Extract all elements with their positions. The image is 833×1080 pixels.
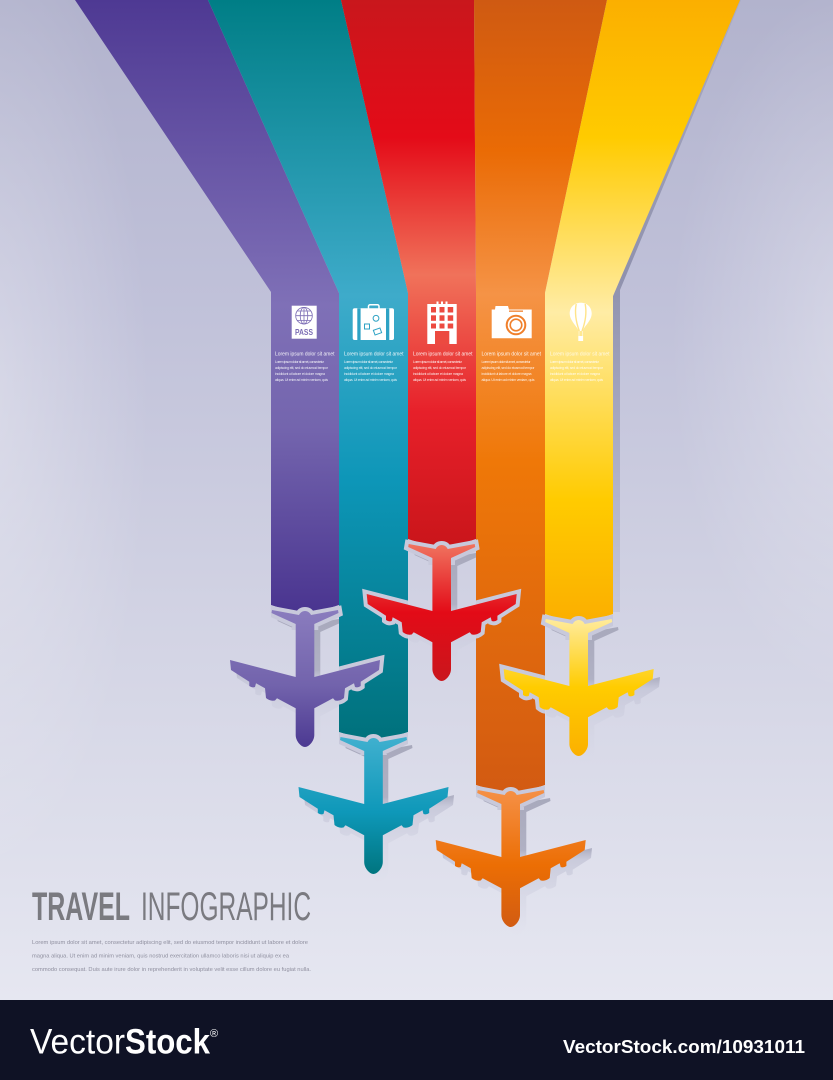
text block: teal column: Lorem ipsum dolor sit amet, consectetur [344, 360, 394, 364]
text block: red column: aliqua. Ut enim ad minim veniam, quis [413, 378, 466, 382]
ribbon: teal [208, 0, 408, 740]
text block: purple column: Lorem ipsum dolor sit amet [275, 352, 335, 358]
text block: red column: incididunt ut labore et dolore magna [413, 372, 463, 376]
text block: yellow column [550, 352, 610, 382]
text block: red column: adipiscing elit, sed do eiusmod tempor [413, 366, 467, 370]
plane shadows [236, 552, 660, 935]
icon: passport [292, 306, 317, 339]
text block: teal column: adipiscing elit, sed do eiusmod tempor [344, 366, 398, 370]
ribbon: purple [75, 0, 339, 613]
text block: teal column: aliqua. Ut enim ad minim veniam, quis [344, 378, 397, 382]
text block: red column [413, 352, 473, 382]
text block: yellow column: adipiscing elit, sed do eiusmod tempor [550, 366, 604, 370]
text block: orange column: Lorem ipsum dolor sit amet [482, 352, 541, 358]
text block: orange column: incididunt ut labore et dolore magna [482, 372, 532, 376]
footer image id: VectorStock.com/10931011 [563, 1036, 805, 1057]
text block: yellow column: Lorem ipsum dolor sit amet [550, 352, 610, 358]
ribbon: yellow [545, 0, 740, 622]
text block: purple column: adipiscing elit, sed do eiusmod tempor [275, 366, 329, 370]
text block: teal column: incididunt ut labore et dolore magna [344, 372, 394, 376]
title [32, 885, 311, 929]
text block: purple column: aliqua. Ut enim ad minim veniam, quis [275, 378, 328, 382]
description text [32, 940, 311, 973]
text block: yellow column: aliqua. Ut enim ad minim veniam, quis [550, 378, 603, 382]
text block: teal column: Lorem ipsum dolor sit amet [344, 352, 404, 358]
text block: orange column [482, 352, 541, 382]
plane: orange [436, 790, 586, 927]
icon: passport: PASS [295, 327, 313, 337]
plane: yellow [504, 619, 654, 756]
ribbon: orange [474, 0, 607, 793]
icon: suitcase [353, 305, 394, 340]
text block: orange column: adipiscing elit, sed do eiusmod tempor [482, 366, 535, 370]
footer logo: Vector [30, 1022, 125, 1062]
text block: purple column: Lorem ipsum dolor sit amet, consectetur [275, 360, 325, 364]
text block: orange column: aliqua. Ut enim ad minim veniam, quis [482, 378, 535, 382]
footer logo: ® [210, 1028, 218, 1040]
icon: hot air balloon [570, 303, 592, 341]
footer logo: Stock [125, 1022, 210, 1062]
text block: yellow column: Lorem ipsum dolor sit amet, consectetur [550, 360, 600, 364]
plane: teal [298, 737, 448, 874]
icon: camera [492, 306, 532, 338]
text block: orange column: Lorem ipsum dolor sit amet, consectetur [482, 360, 531, 364]
text block: purple column: incididunt ut labore et dolore magna [275, 372, 325, 376]
footer logo [30, 1022, 218, 1062]
text block: red column: Lorem ipsum dolor sit amet [413, 352, 473, 358]
title: TRAVEL [32, 885, 130, 929]
text block: purple column [275, 352, 335, 382]
ribbon: red [341, 0, 476, 547]
plane: red [367, 544, 517, 681]
icon: hotel [427, 302, 457, 344]
plane cutout outlines [271, 539, 613, 810]
yellow ribbon drop shadow [613, 0, 741, 612]
plane: purple [230, 610, 380, 747]
title: INFOGRAPHIC [141, 885, 311, 929]
text block: yellow column: incididunt ut labore et dolore magna [550, 372, 600, 376]
description text: commodo consequat. Duis aute irure dolor in reprehenderit in voluptate velit esse cillum dolore eu fugiat nulla. [32, 967, 311, 973]
description text: Lorem ipsum dolor sit amet, consectetur adipiscing elit, sed do eiusmod tempor incididunt ut labore et dolore [32, 940, 308, 946]
footer bar [0, 1000, 833, 1080]
description text: magna aliqua. Ut enim ad minim veniam, quis nostrud exercitation ullamco laboris nisi ut aliquip ex ea [32, 954, 290, 960]
text block: red column: Lorem ipsum dolor sit amet, consectetur [413, 360, 463, 364]
text block: teal column [344, 352, 404, 382]
